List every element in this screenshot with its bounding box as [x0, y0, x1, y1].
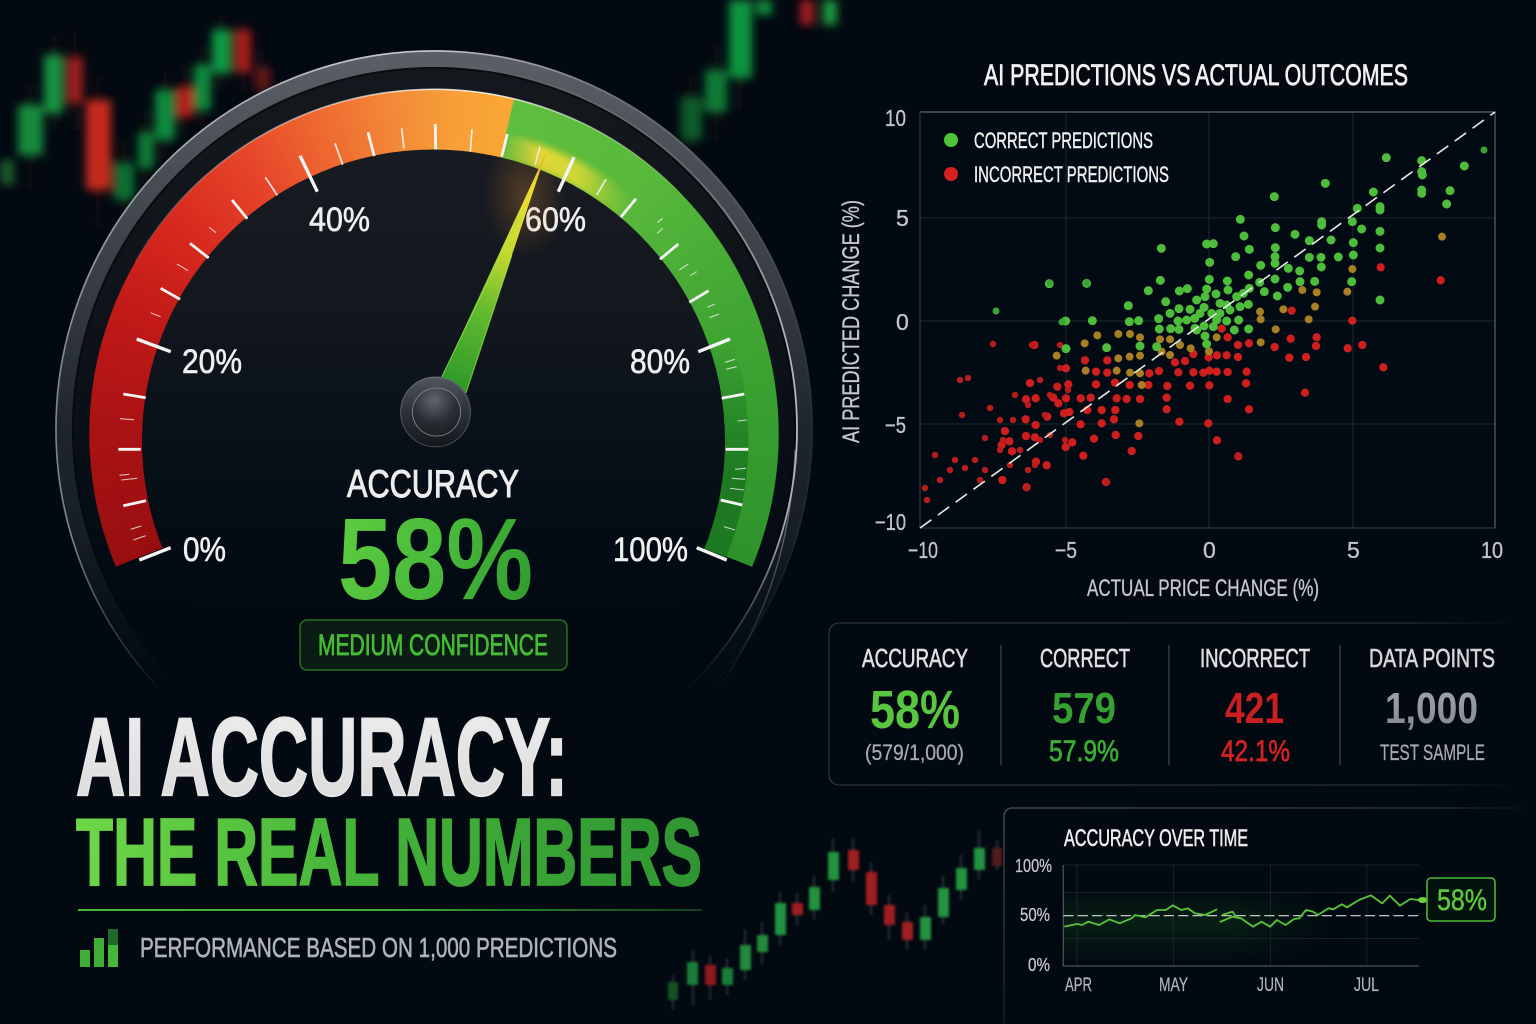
stat: data points — [1369, 645, 1495, 765]
subtitle: PERFORMANCE BASED ON 1,000 PREDICTIONS — [140, 932, 617, 963]
stat: incorrect: INCORRECT — [1200, 645, 1310, 673]
gauge scale labels: 0% — [183, 531, 226, 569]
chart y labels: 0% — [1028, 954, 1050, 975]
chart x labels: JUL — [1354, 975, 1379, 996]
overlap dots — [1057, 237, 1442, 423]
scatter y axis labels: 0 — [896, 309, 909, 335]
stat: correct — [1040, 645, 1130, 768]
gauge scale labels: 20% — [182, 343, 242, 381]
gauge hub — [400, 376, 471, 448]
scatter x axis labels: −5 — [1055, 537, 1077, 563]
stat: incorrect: 421 — [1225, 684, 1284, 733]
scatter x axis labels: 10 — [1481, 537, 1503, 563]
diagonal reference line — [920, 112, 1495, 528]
scatter plot — [920, 112, 1495, 528]
current value badge: 58% — [1437, 884, 1487, 917]
chart y labels — [1015, 855, 1052, 975]
gauge ticks — [118, 124, 748, 560]
icon: bars — [80, 929, 118, 967]
stat: incorrect: 42.1% — [1221, 735, 1290, 768]
gauge bezel and dial — [55, 50, 813, 686]
stat: correct: 579 — [1052, 684, 1116, 733]
scatter legend: INCORRECT PREDICTIONS — [974, 162, 1169, 187]
stat: correct: 57.9% — [1049, 735, 1119, 768]
scatter x axis labels — [908, 537, 1503, 602]
gauge reading: 58%: 58% — [338, 494, 533, 624]
chart y labels: 50% — [1020, 904, 1050, 925]
scatter x axis labels: 5 — [1347, 537, 1360, 563]
gauge scale labels: 60% — [525, 201, 586, 239]
title: THE REAL NUMBERS — [76, 799, 702, 906]
stat: accuracy — [862, 645, 968, 765]
dial face — [142, 150, 725, 732]
scatter y axis labels: −5 — [885, 412, 906, 438]
incorrect prediction dots — [925, 267, 1441, 500]
current value badge — [1427, 878, 1495, 921]
scatter x axis labels: −10 — [908, 537, 938, 563]
scatter x axis labels: ACTUAL PRICE CHANGE (%) — [1087, 575, 1319, 602]
chart x labels — [1065, 975, 1379, 996]
panel heading: ACCURACY OVER TIME — [1064, 825, 1248, 852]
title: AI ACCURACY: — [76, 696, 568, 819]
scatter legend — [944, 128, 1169, 187]
scatter x axis labels: 0 — [1203, 537, 1216, 563]
gauge needle — [442, 133, 567, 393]
stat: incorrect — [1200, 645, 1310, 768]
scatter y axis labels: 10 — [885, 105, 906, 131]
scatter y axis labels: AI PREDICTED CHANGE (%) — [838, 200, 865, 443]
medium confidence badge: MEDIUM CONFIDENCE — [318, 629, 548, 662]
scatter y axis labels: −10 — [875, 509, 906, 535]
scatter y axis labels — [838, 105, 909, 535]
far-left green dots — [996, 150, 1484, 322]
stat: data points: DATA POINTS — [1369, 645, 1495, 673]
title — [76, 696, 702, 906]
scatter legend: CORRECT PREDICTIONS — [974, 128, 1153, 153]
stat: data points: 1,000 — [1385, 684, 1478, 733]
gauge reading: accuracy label: ACCURACY — [347, 463, 519, 506]
gauge colored arc — [89, 89, 779, 567]
gauge scale labels: 100% — [613, 531, 688, 569]
gauge scale labels: 80% — [630, 343, 690, 381]
stat: correct: CORRECT — [1040, 645, 1130, 673]
stats panel — [829, 623, 1515, 785]
stat: accuracy: ACCURACY — [862, 645, 968, 673]
scatter y axis labels: 5 — [896, 205, 909, 231]
accuracy over time panel — [1004, 808, 1536, 1024]
line chart — [1063, 865, 1427, 966]
chart x labels: JUN — [1257, 975, 1284, 996]
arc shading — [135, 89, 736, 553]
stat: data points: TEST SAMPLE — [1380, 740, 1485, 765]
medium confidence badge — [300, 620, 567, 670]
chart x labels: MAY — [1159, 975, 1188, 996]
correct prediction dots — [1049, 158, 1464, 349]
chart y labels: 100% — [1015, 855, 1052, 876]
stat: accuracy: 58% — [870, 680, 960, 740]
gauge scale labels: 40% — [309, 201, 370, 239]
gauge scale labels — [182, 201, 690, 569]
stat: accuracy: (579/1,000) — [865, 740, 964, 765]
chart x labels: APR — [1065, 975, 1092, 996]
